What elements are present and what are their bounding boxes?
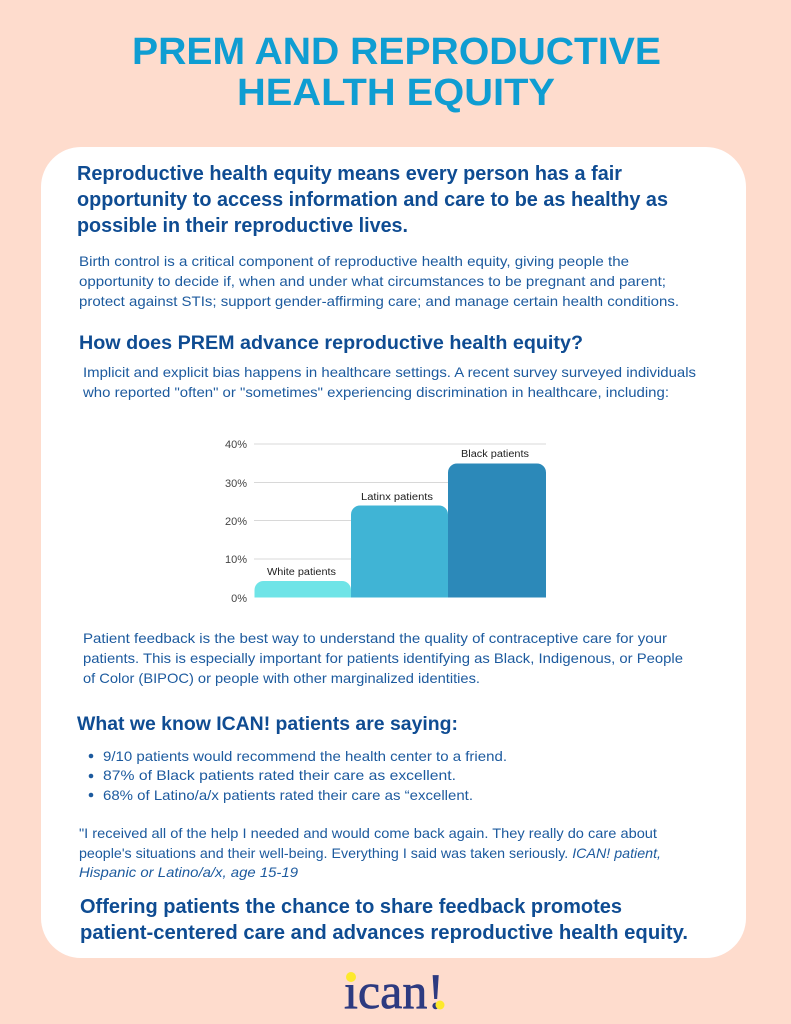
y axis labels xyxy=(225,439,247,605)
text block: patient feedback: Patient feedback is the best way to understand the quality of contraceptive care for your xyxy=(83,630,667,646)
bar chart xyxy=(225,439,546,605)
patient quote: Hispanic or Latino/a/x, age 15-19 xyxy=(79,864,298,880)
closing statement: patient-centered care and advances reproductive health equity. xyxy=(80,922,688,944)
patient quote: people's situations and their well-being. Everything I said was taken seriously. ICAN! patient, xyxy=(79,845,661,861)
heading: how does PREM: How does PREM advance reproductive health equity? xyxy=(79,333,583,354)
text block: patient feedback: patients. This is especially important for patients identifying as Black, Indigenous, or People xyxy=(83,650,683,666)
y axis labels: 30% xyxy=(225,478,247,490)
lead statement: possible in their reproductive lives. xyxy=(77,215,408,237)
y axis labels: 20% xyxy=(225,516,247,528)
bar labels: White patients xyxy=(267,567,336,578)
lead statement: opportunity to access information and care to be as healthy as xyxy=(77,189,668,211)
bullet list xyxy=(89,748,507,803)
text block: birth control: opportunity to decide if, when and under what circumstances to be pregnant and parent; xyxy=(79,273,666,289)
bullet list: 9/10 patients would recommend the health center to a friend. xyxy=(103,748,507,764)
logo: ican!: ican! xyxy=(344,963,444,1019)
text block: bias survey: who reported "often" or "sometimes" experiencing discrimination in healthcare, including: xyxy=(82,384,669,400)
closing statement xyxy=(80,896,688,944)
bar labels: Latinx patients xyxy=(361,492,433,503)
y axis labels: 10% xyxy=(225,554,247,566)
lead statement: Reproductive health equity means every person has a fair xyxy=(77,163,622,185)
bar: white patients xyxy=(254,581,351,598)
bullet list: 68% of Latino/a/x patients rated their care as “excellent. xyxy=(103,787,473,803)
bar labels: Black patients xyxy=(461,449,529,460)
title: PREM AND REPRODUCTIVE xyxy=(132,31,661,73)
title xyxy=(132,31,661,114)
bar labels xyxy=(267,449,529,578)
bar: latinx patients xyxy=(351,506,448,598)
patient quote: "I received all of the help I needed and would come back again. They really do care about xyxy=(79,825,657,841)
text block: bias survey: Implicit and explicit bias happens in healthcare settings. A recent survey surveyed individuals xyxy=(83,364,696,380)
title: HEALTH EQUITY xyxy=(237,72,555,114)
bullet list: 87% of Black patients rated their care as excellent. xyxy=(103,767,456,783)
patient quote xyxy=(79,825,661,880)
panel: white card xyxy=(41,147,746,958)
text block: birth control xyxy=(79,253,679,309)
text block: patient feedback xyxy=(83,630,683,686)
text block: bias survey xyxy=(82,364,696,400)
lead statement xyxy=(77,163,668,237)
text block: birth control: protect against STIs; support gender-affirming care; and manage certain health conditions. xyxy=(79,293,679,309)
y axis labels: 40% xyxy=(225,439,247,451)
bar: black patients xyxy=(448,464,546,598)
closing statement: Offering patients the chance to share feedback promotes xyxy=(80,896,622,918)
y axis labels: 0% xyxy=(231,593,247,605)
text block: patient feedback: of Color (BIPOC) or people with other marginalized identities. xyxy=(83,670,480,686)
heading: what we know: What we know ICAN! patients are saying: xyxy=(77,714,458,735)
text block: birth control: Birth control is a critical component of reproductive health equity, giving people the xyxy=(79,253,629,269)
